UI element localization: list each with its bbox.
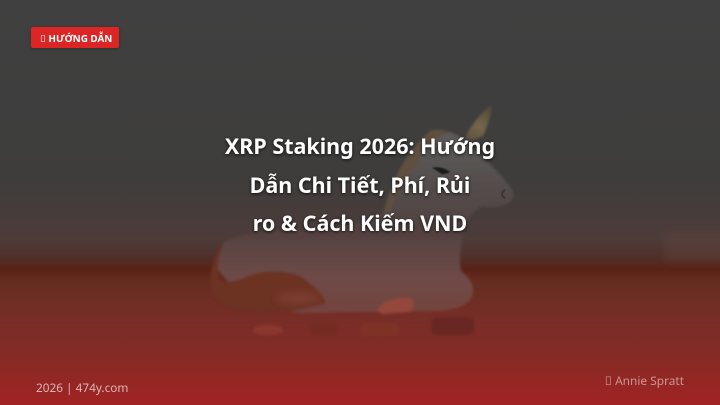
photo credit:  Annie Spratt: [605, 373, 684, 389]
pebbles: [253, 317, 474, 336]
unicorn horn: [466, 105, 491, 140]
title: XRP Staking 2026: Hướng: [225, 132, 495, 161]
title: [224, 132, 495, 238]
title: ro & Cách Kiếm VND: [253, 209, 467, 238]
unicorn body and head: [215, 130, 513, 313]
category badge: [31, 27, 119, 48]
title: Dẫn Chi Tiết, Phí, Rủi: [250, 170, 470, 200]
category badge:  HƯỚNG DẪN: [40, 31, 112, 45]
golden tail: [210, 243, 325, 312]
site credit: 2026 | 474y.com: [36, 380, 128, 396]
unicorn mane: [384, 130, 450, 214]
hoof: [377, 298, 413, 314]
unicorn eye and nostril: [432, 167, 505, 198]
lighter wall patch at far right: [665, 232, 720, 261]
tail highlight: [276, 292, 320, 304]
